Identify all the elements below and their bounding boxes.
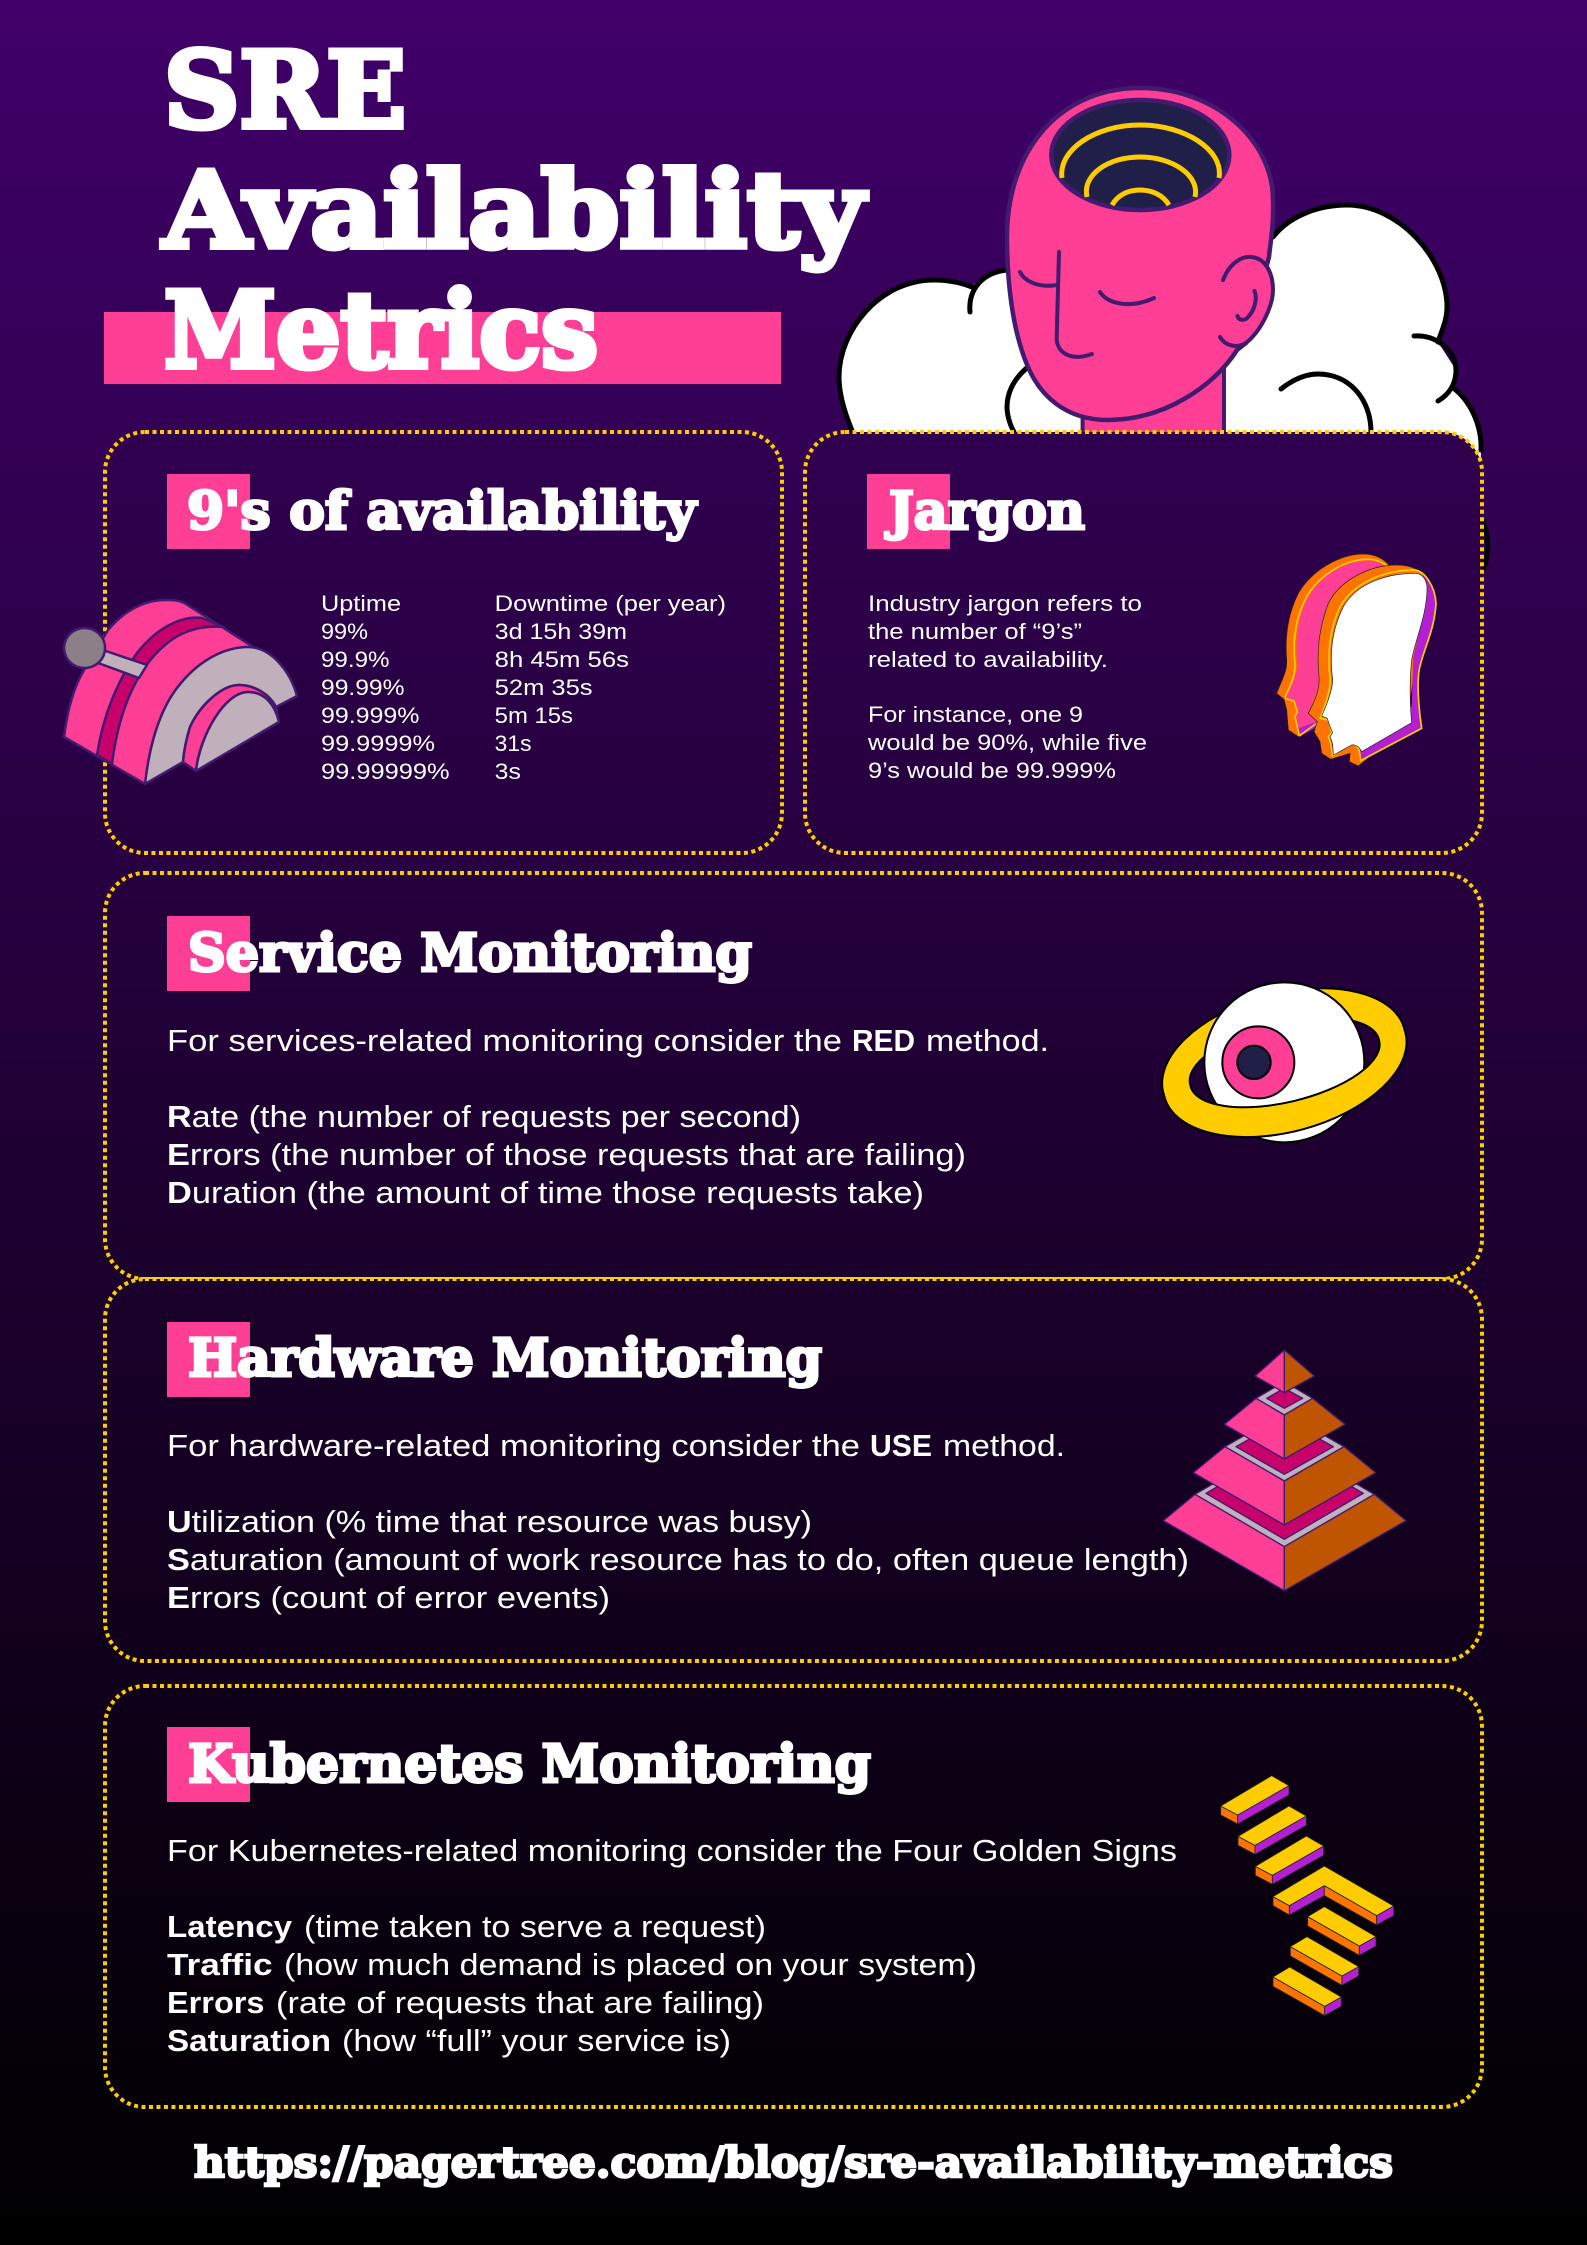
panel: 9's of availability bbox=[64, 432, 782, 853]
uptime table: 5m 15s bbox=[495, 703, 573, 728]
service text: RED bbox=[852, 1023, 915, 1058]
service text: Duration (the amount of time those requests take) bbox=[167, 1175, 924, 1210]
icon: lever machine bbox=[64, 600, 297, 784]
panel: hardware monitoring bbox=[105, 1279, 1482, 1661]
hardware text: USE bbox=[870, 1428, 932, 1463]
footer url: https://pagertree.com/blog/sre-availability-metrics bbox=[194, 2138, 1393, 2187]
heading: 9's of availability bbox=[187, 481, 698, 542]
hardware text: For hardware-related monitoring consider the bbox=[167, 1428, 860, 1463]
ear bbox=[1220, 257, 1273, 346]
kubernetes text: (how much demand is placed on your system) bbox=[284, 1947, 977, 1982]
hardware text: Errors (count of error events) bbox=[167, 1580, 610, 1615]
panel: jargon bbox=[805, 432, 1482, 853]
uptime table: 3d 15h 39m bbox=[495, 619, 627, 644]
uptime table: 99.9% bbox=[321, 647, 390, 672]
illustration: head in clouds bbox=[839, 88, 1488, 570]
head shape bbox=[1007, 88, 1273, 420]
uptime table: 99% bbox=[321, 619, 368, 644]
hardware text: Utilization (% time that resource was busy) bbox=[167, 1504, 812, 1539]
uptime table: 99.9999% bbox=[321, 731, 435, 756]
kubernetes text: (time taken to serve a request) bbox=[304, 1909, 766, 1944]
service text: Errors (the number of those requests that are failing) bbox=[167, 1137, 966, 1172]
hardware text bbox=[167, 1428, 1189, 1615]
clouds bbox=[839, 205, 1488, 570]
title: Metrics bbox=[164, 268, 598, 392]
uptime table bbox=[321, 591, 726, 784]
title bbox=[104, 28, 867, 392]
title: SRE bbox=[164, 28, 406, 152]
title: Availability bbox=[162, 148, 867, 272]
uptime table: Uptime bbox=[321, 591, 401, 616]
uptime table: 99.99999% bbox=[321, 759, 450, 784]
heading highlight bbox=[167, 1322, 250, 1397]
heading highlight bbox=[167, 474, 250, 549]
kubernetes text: Saturation bbox=[167, 2023, 331, 2058]
heading: Hardware Monitoring bbox=[188, 1328, 822, 1389]
heading highlight bbox=[167, 916, 250, 991]
uptime table: 3s bbox=[495, 759, 521, 784]
kubernetes text: (rate of requests that are failing) bbox=[276, 1985, 764, 2020]
jargon text: would be 90%, while five bbox=[867, 730, 1147, 755]
icon: pyramid bbox=[1163, 1350, 1406, 1591]
heading highlight bbox=[167, 1727, 250, 1802]
kubernetes text: For Kubernetes-related monitoring consider the Four Golden Signs bbox=[167, 1833, 1177, 1868]
kubernetes text: Latency bbox=[167, 1909, 293, 1944]
uptime table: 99.999% bbox=[321, 703, 420, 728]
kubernetes text: (how “full” your service is) bbox=[342, 2023, 731, 2058]
uptime table: 8h 45m 56s bbox=[495, 647, 629, 672]
neck bbox=[1083, 360, 1224, 440]
service text: For services-related monitoring consider the bbox=[167, 1023, 842, 1058]
service text bbox=[167, 1023, 1049, 1210]
uptime table: 31s bbox=[495, 731, 532, 756]
hole in head bbox=[1051, 100, 1229, 210]
panel: service monitoring bbox=[105, 873, 1482, 1279]
service text: method. bbox=[926, 1023, 1049, 1058]
heading: Jargon bbox=[885, 481, 1085, 542]
uptime table: 99.99% bbox=[321, 675, 404, 700]
uptime table: Downtime (per year) bbox=[495, 591, 726, 616]
face lines bbox=[1020, 252, 1154, 357]
kubernetes text: Traffic bbox=[167, 1947, 273, 1982]
heading: Kubernetes Monitoring bbox=[188, 1734, 871, 1795]
heading: Service Monitoring bbox=[188, 923, 752, 984]
yellow rings bbox=[1062, 125, 1219, 205]
icon: ringed eyeball bbox=[1162, 982, 1407, 1142]
service text: Rate (the number of requests per second) bbox=[167, 1099, 801, 1134]
kubernetes text bbox=[167, 1833, 1177, 2058]
uptime table: 52m 35s bbox=[495, 675, 593, 700]
jargon text: For instance, one 9 bbox=[868, 702, 1083, 727]
panel: kubernetes monitoring bbox=[105, 1686, 1482, 2107]
jargon text: related to availability. bbox=[868, 647, 1108, 672]
jargon text: the number of “9’s” bbox=[868, 619, 1082, 644]
jargon text bbox=[867, 591, 1147, 783]
kubernetes text: Errors bbox=[167, 1985, 264, 2020]
icon: head profiles bbox=[1277, 554, 1437, 766]
hardware text: method. bbox=[943, 1428, 1065, 1463]
heading highlight bbox=[867, 474, 950, 549]
hardware text: Saturation (amount of work resource has to do, often queue length) bbox=[167, 1542, 1189, 1577]
jargon text: 9’s would be 99.999% bbox=[868, 758, 1116, 783]
icon: isometric bars bbox=[1221, 1776, 1394, 2016]
jargon text: Industry jargon refers to bbox=[868, 591, 1142, 616]
